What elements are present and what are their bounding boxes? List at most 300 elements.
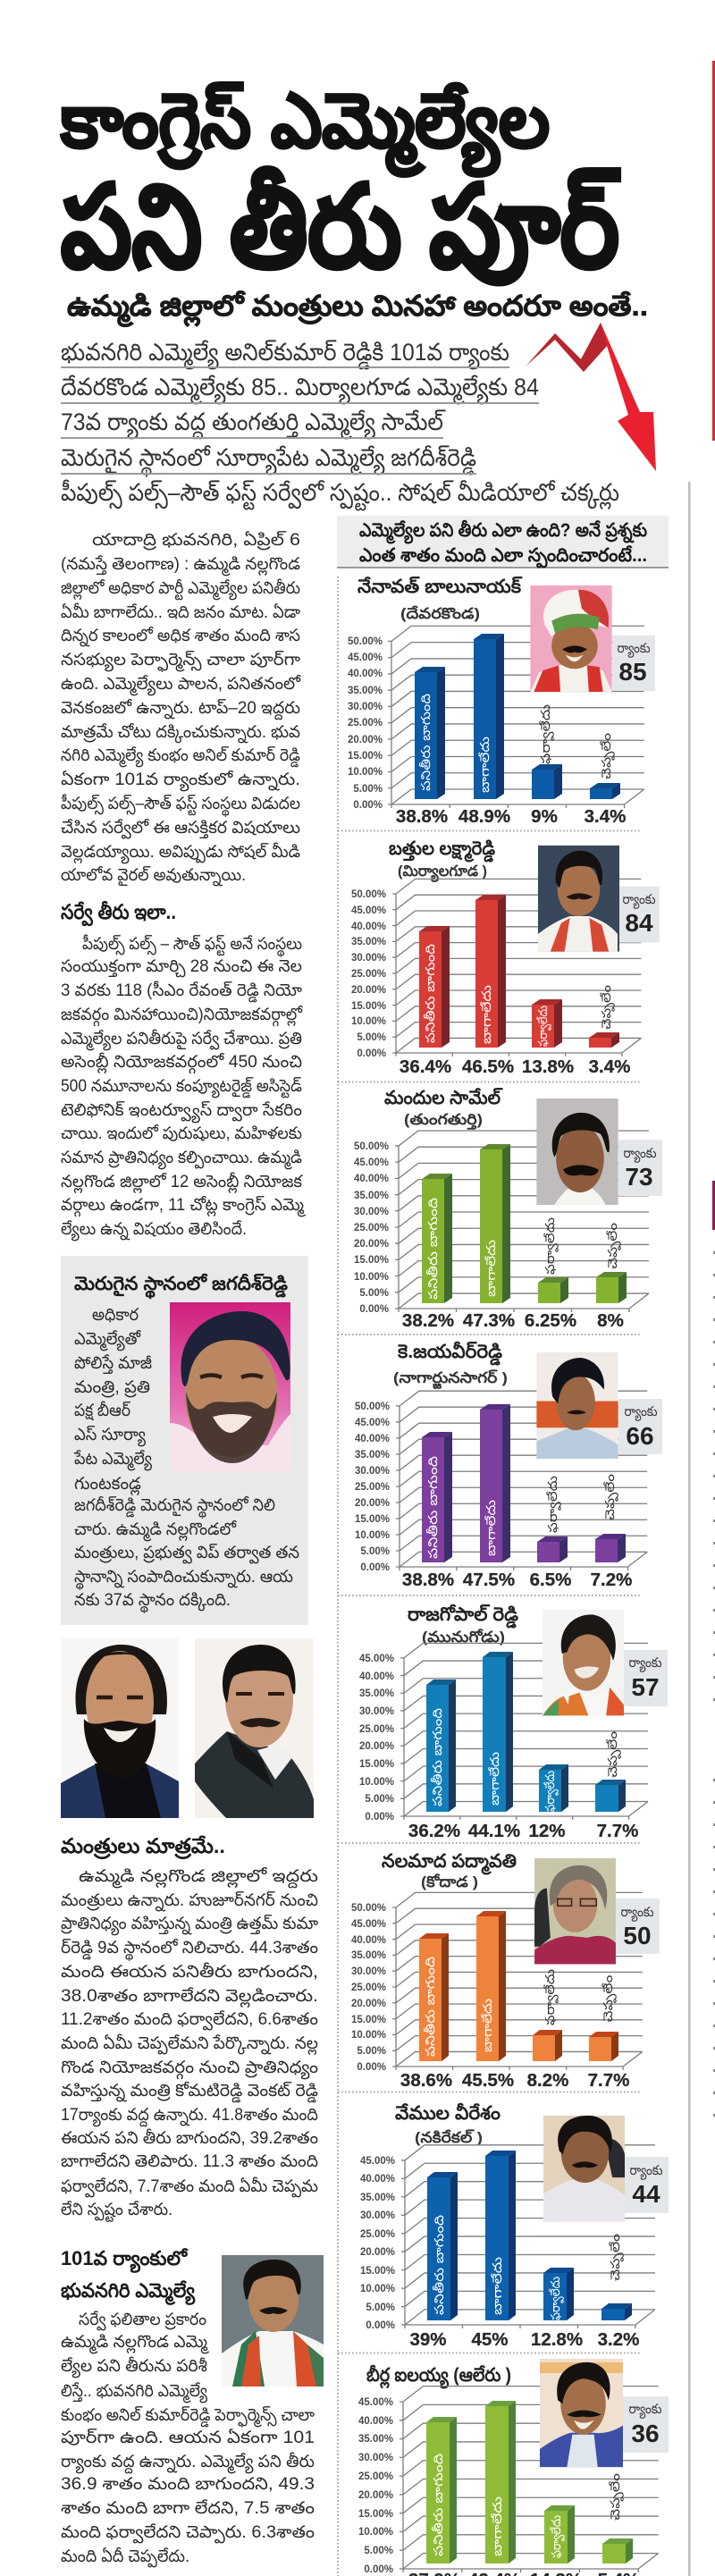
chart panel: Balu Naik: 9% bbox=[531, 806, 558, 827]
chart panel: Jayaveer Reddy: 38.8% bbox=[402, 1570, 454, 1590]
chart panel: Samel: 40.00% bbox=[354, 1174, 389, 1184]
chart panel: Samel: 35.00% bbox=[354, 1191, 389, 1201]
rank badge: 57: ర్యాంకు bbox=[629, 1655, 661, 1672]
article: rank 101 text: ల్యేల పని తీరును పరిశీ bbox=[61, 2357, 207, 2378]
chart panel: Jayaveer Reddy: 6.5% bbox=[530, 1570, 571, 1590]
deck lines: భువనగిరి ఎమ్మెల్యే అనిల్‌కుమార్ రెడ్డికి 101వ ర్యాంకు bbox=[61, 339, 509, 370]
chart panel: Rajagopal Reddy: 12% bbox=[528, 1821, 566, 1841]
chart panel: Ilaiah: 10.00% bbox=[358, 2527, 393, 2538]
chart panel: Lakshma Reddy: 15.00% bbox=[351, 1001, 386, 1012]
article: intro text: (నమస్తే తెలంగాణ) : ఉమ్మడి నల్లగొండ bbox=[61, 555, 300, 577]
chart panel: Balu Naik: ఫర్వాలేదు bbox=[538, 704, 554, 764]
chart panel: Padmavathi: 45.5% bbox=[462, 2070, 514, 2091]
chart panel: Veeresham: బాగాలేదు bbox=[490, 2257, 504, 2315]
chart panel: Veeresham: 0.00% bbox=[366, 2320, 395, 2331]
chart panel: Rajagopal Reddy: రాజగోపాల్ రెడ్డి bbox=[408, 1604, 518, 1629]
chart panel: Rajagopal Reddy: 35.00% bbox=[359, 1688, 394, 1699]
chart panel: Samel: 10.00% bbox=[354, 1272, 389, 1283]
chart panel: Veeresham: 3.2% bbox=[598, 2329, 639, 2350]
chart panel: Ilaiah: బాగాలేదు bbox=[490, 2496, 504, 2556]
text: Jagadish Reddy: గుంటకండ్ల bbox=[74, 1475, 141, 1496]
chart panel: Padmavathi: 38.6% bbox=[400, 2070, 452, 2091]
article: survey text: 500 నమూనాలను కంప్యూటరైజ్డ్ అసిస్టెడ్ bbox=[61, 1077, 302, 1099]
article: intro text bbox=[61, 531, 301, 887]
text: Jagadish Reddy: చారు. ఉమ్మడి నల్లగొండలో bbox=[74, 1520, 237, 1542]
chart panel: Rajagopal Reddy: 30.00% bbox=[359, 1706, 394, 1717]
chart panel: Rajagopal Reddy: పనితీరు బాగుంది bbox=[430, 1708, 444, 1806]
article: rank 101 text: పూర్‌గా ఉంది. ఆయన ఏకంగా 101 bbox=[61, 2429, 315, 2447]
chart panel: Veeresham: 30.00% bbox=[360, 2210, 395, 2221]
chart panel: Balu Naik: 5.00% bbox=[353, 784, 383, 795]
chart panel: Padmavathi: 25.00% bbox=[351, 1983, 386, 1993]
title: పని తీరు పూర్ bbox=[61, 164, 620, 291]
chart panel: Balu Naik: 0.00% bbox=[353, 800, 383, 811]
chart panel: Padmavathi: 30.00% bbox=[351, 1966, 386, 1977]
article: intro text: మాత్రమే చోటు దక్కించుకున్నారు. భువ bbox=[61, 723, 300, 744]
chart panel: Padmavathi bbox=[351, 1851, 660, 2091]
chart panel: Padmavathi: (కోదాడ ) bbox=[421, 1873, 478, 1890]
chart panel: Lakshma Reddy: బాగాలేదు bbox=[479, 985, 493, 1044]
chart panel: Jayaveer Reddy: 7.2% bbox=[591, 1570, 632, 1590]
chart panel: Ilaiah: 0.00% bbox=[364, 2564, 393, 2575]
rank badge: 85: 85 bbox=[618, 658, 647, 686]
chart panel: Balu Naik: 10.00% bbox=[348, 767, 383, 778]
rank badge: 44: 44 bbox=[632, 2180, 660, 2208]
chart panel: Samel: పనితీరు బాగుంది bbox=[425, 1198, 440, 1300]
article: survey text: చాయి. ఇందులో పురుషులు, మహిళలకు bbox=[61, 1124, 302, 1143]
chart panel: Rajagopal Reddy: 25.00% bbox=[359, 1724, 394, 1735]
article: rank 101 text: శాతం మంది బాగా లేదని, 7.5 శాతం bbox=[61, 2499, 315, 2518]
rank badge: 57: 57 bbox=[631, 1673, 660, 1701]
chart panel: Balu Naik: 15.00% bbox=[348, 751, 383, 762]
chart panel: Samel: ఫర్వాలేదు bbox=[543, 1217, 559, 1275]
chart panel: Padmavathi: 15.00% bbox=[351, 2015, 386, 2025]
rank badge: 36: ర్యాంకు bbox=[629, 2402, 661, 2419]
chart panel: Samel: చెప్పలేం bbox=[605, 1223, 621, 1269]
chart panel: Padmavathi: 0.00% bbox=[357, 2062, 386, 2073]
article: ministers text: మంది ఏమీ చెప్పలేమని పేర్కొన్నారు. నల్ల bbox=[61, 2034, 318, 2056]
chart panel: Lakshma Reddy: 45.00% bbox=[351, 905, 386, 916]
rank badge: 66 bbox=[618, 1399, 662, 1454]
rank badge: 73: 73 bbox=[625, 1163, 653, 1191]
chart panel: Balu Naik: 20.00% bbox=[348, 735, 383, 745]
icon: falling red arrow bbox=[526, 323, 656, 471]
chart panel: Padmavathi: 45.00% bbox=[351, 1919, 386, 1930]
rank badge: 50: 50 bbox=[623, 1922, 652, 1949]
heading: ministers: మంత్రులు మాత్రమే.. bbox=[61, 1834, 225, 1860]
chart panel: Rajagopal Reddy bbox=[359, 1604, 668, 1841]
chart panel: Jayaveer Reddy bbox=[355, 1341, 662, 1590]
chart panel: Jayaveer Reddy: 10.00% bbox=[355, 1530, 390, 1541]
rank badge: 50: ర్యాంకు bbox=[620, 1905, 654, 1922]
rank badge: 44 bbox=[625, 2157, 669, 2213]
chart panel: Veeresham: ఫర్వాలేదు bbox=[548, 2277, 564, 2320]
chart panel: Padmavathi: ఫర్వాలేదు bbox=[543, 1969, 559, 2025]
article: ministers text: మంది ఈయన పనితీరు బాగుందని, bbox=[61, 1963, 318, 1982]
article: survey text: టెలిఫోనిక్ ఇంటర్వ్యూస్ ద్వారా సేకరిం bbox=[61, 1101, 302, 1124]
chart panel: Padmavathi: 10.00% bbox=[351, 2030, 386, 2041]
rank badge: 57 bbox=[624, 1650, 668, 1706]
article: rank 101 text: ర్యాంకు వద్ద ఉన్నారు. ఎమ్మెల్యే పని తీరు bbox=[61, 2453, 315, 2474]
chart panel: Jayaveer Reddy: 0.00% bbox=[360, 1562, 390, 1573]
chart panel: Veeresham: 45% bbox=[471, 2329, 509, 2350]
chart panel: Padmavathi: 5.00% bbox=[357, 2046, 386, 2057]
article: intro text: ఉంది. ఎమ్మెల్యేలు పాలన, పనితనంలో bbox=[61, 675, 301, 696]
article: ministers text: మంత్రులు ఉన్నారు. హుజూర్‌నగర్ నుంచి bbox=[61, 1891, 318, 1912]
chart panel: Lakshma Reddy: 0.00% bbox=[357, 1048, 386, 1059]
chart panel: Jayaveer Reddy: (నాగార్జునసాగర్ ) bbox=[393, 1369, 508, 1389]
chart panel: Veeresham: 12.8% bbox=[531, 2329, 583, 2350]
heading: rank 101: భువనగిరి ఎమ్మెల్యే bbox=[61, 2279, 196, 2305]
chart panel: Veeresham: 45.00% bbox=[360, 2156, 395, 2167]
article: ministers text: బాగాలేదని తెలిపారు. 11.3 శాతం మంది bbox=[61, 2152, 318, 2171]
chart panel: Veeresham: 39% bbox=[409, 2329, 447, 2350]
rank badge: 66: ర్యాంకు bbox=[624, 1404, 658, 1421]
chart panel: Balu Naik: చెప్పలేం bbox=[599, 733, 615, 779]
rank badge: 84 bbox=[619, 887, 660, 942]
chart panel: Jayaveer Reddy: 47.5% bbox=[463, 1570, 515, 1590]
chart panel: Samel: 47.3% bbox=[463, 1310, 515, 1331]
chart panel: Veeresham: (నకిరేకల్ ) bbox=[415, 2129, 483, 2146]
chart panel: Jayaveer Reddy: 20.00% bbox=[355, 1498, 390, 1509]
chart panel: Ilaiah bbox=[358, 2359, 669, 2576]
rank badge: 85 bbox=[612, 636, 655, 691]
chart panel: Balu Naik: 50.00% bbox=[348, 636, 383, 647]
chart panel: Veeresham: 15.00% bbox=[360, 2266, 395, 2277]
article: intro text: వెల్లడయ్యాయి. అవిప్పుడు సోషల్ మీడి bbox=[61, 843, 300, 864]
article: survey text: వర్గాలు ఉండగా, 11 చోట్ల కాంగ్రెస్ ఎమ్మె bbox=[61, 1196, 307, 1217]
chart panel: Rajagopal Reddy: 15.00% bbox=[359, 1759, 394, 1770]
column rule bbox=[688, 482, 690, 2576]
chart panel: Veeresham: చెప్పలేం bbox=[608, 2234, 624, 2281]
chart panel: Samel: 15.00% bbox=[354, 1255, 389, 1266]
chart panel: Padmavathi: 8.2% bbox=[527, 2070, 568, 2091]
chart panel: Lakshma Reddy: 10.00% bbox=[351, 1016, 386, 1027]
article: intro text: దిన్నర కాలంలో అధిక శాతం మంది శాస bbox=[61, 627, 300, 647]
deck lines: 73వ ర్యాంకు వద్ద తుంగతుర్తి ఎమ్మెల్యే సామేల్ bbox=[61, 408, 446, 440]
chart panel: Rajagopal Reddy: 45.00% bbox=[359, 1654, 394, 1664]
article: survey text: సంయుక్తంగా మార్చి 28 నుంచి ఈ నెల bbox=[61, 957, 302, 978]
article: intro text: ఏమీ బాగాలేదు.. ఇది జనం మాట. ఏడా bbox=[61, 603, 301, 622]
chart panel: Padmavathi: బాగాలేదు bbox=[480, 1999, 494, 2052]
photo: Veeresham bbox=[543, 2115, 625, 2222]
deck lines: పీపుల్స్ పల్స్–సౌత్ ఫస్ట్ సర్వేలో స్పష్టం.. సోషల్ మీడియాలో చక్కర్లు bbox=[61, 479, 619, 511]
chart panel: Veeresham: వేముల వీరేశం bbox=[395, 2102, 500, 2124]
chart panel: Samel bbox=[354, 1088, 662, 1331]
article: ministers text: లేని స్పష్టం చేశారు. bbox=[61, 2201, 172, 2223]
chart panel: Lakshma Reddy: చెప్పలేం bbox=[599, 985, 615, 1030]
chart panel: Samel: (తుంగతుర్తి) bbox=[404, 1111, 483, 1130]
chart panel: Jayaveer Reddy: 5.00% bbox=[360, 1546, 390, 1557]
chart panel: Balu Naik: 30.00% bbox=[348, 702, 383, 712]
rank badge: 66: 66 bbox=[626, 1422, 654, 1450]
heading: rank 101 bbox=[61, 2247, 196, 2305]
photo: minister Uttam bbox=[61, 1638, 179, 1818]
chart panel: Lakshma Reddy: 36.4% bbox=[400, 1056, 451, 1077]
article: survey text bbox=[61, 934, 307, 1242]
photo: Samel bbox=[536, 1099, 618, 1205]
article: ministers text bbox=[61, 1867, 318, 2223]
chart panel: Rajagopal Reddy: బాగాలేదు bbox=[487, 1752, 501, 1806]
chart panel: Jayaveer Reddy: 25.00% bbox=[355, 1482, 390, 1493]
rank badge: 36 bbox=[623, 2396, 669, 2453]
chart panel: Balu Naik: 3.4% bbox=[585, 806, 626, 827]
chart panel: Balu Naik: 45.00% bbox=[348, 652, 383, 663]
chart panel: Samel: 25.00% bbox=[354, 1223, 389, 1233]
chart panel: Lakshma Reddy: 30.00% bbox=[351, 953, 386, 964]
chart panel: Padmavathi: చెప్పలేం bbox=[601, 1975, 617, 2023]
article: rank 101 text bbox=[61, 2311, 315, 2568]
chart panel: Jayaveer Reddy: 35.00% bbox=[355, 1450, 390, 1461]
chart panel: Samel: 5.00% bbox=[359, 1288, 389, 1299]
chart panel: Lakshma Reddy: బత్తుల లక్ష్మారెడ్డి bbox=[389, 838, 495, 863]
right-edge fragments of the neighbouring page bbox=[712, 61, 715, 2127]
photo: Ilaiah bbox=[540, 2358, 623, 2467]
rank badge: 73 bbox=[618, 1140, 662, 1196]
article: ministers text: ఈయన పని తీరు బాగుందని, 39.2శాతం bbox=[61, 2129, 318, 2148]
chart panel: Balu Naik: 25.00% bbox=[348, 718, 383, 728]
chart panel: Lakshma Reddy: 50.00% bbox=[351, 889, 386, 900]
text: Jagadish Reddy: పక్ష బీఆర్ bbox=[74, 1402, 131, 1421]
chart panel: Balu Naik: 35.00% bbox=[348, 686, 383, 696]
chart panel: Samel: బాగాలేదు bbox=[484, 1240, 498, 1297]
rank badge: 85: ర్యాంకు bbox=[617, 641, 651, 658]
heading: survey: సర్వే తీరు ఇలా.. bbox=[61, 900, 176, 927]
chart panel: Rajagopal Reddy: 36.2% bbox=[408, 1821, 460, 1841]
text: Jagadish Reddy: అధికార bbox=[92, 1306, 139, 1325]
chart panel: Veeresham: 40.00% bbox=[360, 2174, 395, 2185]
article: intro text: యాదాద్రి భువనగిరి, ఏప్రిల్ 6 bbox=[92, 531, 300, 551]
article: intro text: యాలోవ వైరల్ అవుతున్నాయి. bbox=[61, 866, 246, 887]
chart panel: Padmavathi: 35.00% bbox=[351, 1950, 386, 1961]
chart panel: Veeresham: పనితీరు బాగుంది bbox=[432, 2215, 446, 2315]
article: rank 101 text: మంది ఫర్వాలేదని చెప్పారు. 6.3శాతం bbox=[61, 2523, 315, 2544]
chart panel: Samel: 50.00% bbox=[354, 1141, 389, 1152]
chart panel: Padmavathi: 20.00% bbox=[351, 1999, 386, 2009]
chart panel: Samel: 8% bbox=[597, 1310, 624, 1331]
chart panel: Balu Naik: నేనావత్ బాలునాయక్ bbox=[358, 577, 523, 597]
chart panel: Padmavathi: పనితీరు బాగుంది bbox=[423, 1957, 437, 2057]
photo: Bhuvanagiri MLA bbox=[222, 2255, 324, 2387]
article: intro text: వెనకంజలో ఉన్నారు. టాప్–20 ఇద్దరు bbox=[61, 699, 300, 720]
article: ministers text: ర్‌రెడ్డి 9వ స్థానంలో నిలిచారు. 44.3శాతం bbox=[61, 1939, 318, 1961]
chart panel: Lakshma Reddy: ఫర్వాలేదు bbox=[535, 1006, 551, 1047]
chart panel: Rajagopal Reddy: 20.00% bbox=[359, 1741, 394, 1752]
article: rank 101 text: లిస్తే.. భువనగిరి ఎమ్మెల్యే bbox=[61, 2382, 207, 2403]
chart panel: Samel: 45.00% bbox=[354, 1158, 389, 1168]
chart panel: Ilaiah: 30.00% bbox=[358, 2453, 393, 2463]
chart panel: Jayaveer Reddy: బాగాలేదు bbox=[484, 1500, 498, 1556]
article: survey text: పీపుల్స్ పల్స్ – సౌత్ ఫస్ట్ అనే సంస్థలు bbox=[82, 934, 302, 957]
article: ministers text: 11.2శాతం మంది ఫర్వాలేదని, 6.6శాతం bbox=[61, 2010, 318, 2031]
chart panel: Ilaiah: 40.00% bbox=[358, 2416, 393, 2427]
chart panel: Samel: 6.25% bbox=[525, 1310, 576, 1331]
chart panel: Balu Naik: 38.8% bbox=[396, 806, 448, 827]
chart panel: Rajagopal Reddy: 40.00% bbox=[359, 1671, 394, 1682]
title: కాంగ్రెస్ ఎమ్మెల్యేల bbox=[60, 79, 550, 177]
text: Jagadish Reddy: పోలిస్తే మాజీ bbox=[74, 1354, 152, 1375]
chart panel: Lakshma Reddy: 40.00% bbox=[351, 922, 386, 932]
deck lines: దేవరకొండ ఎమ్మెల్యేకు 85.. మిర్యాలగూడ ఎమ్మెల్యేకు 84 bbox=[61, 374, 539, 405]
chart panel: Ilaiah: 15.00% bbox=[358, 2509, 393, 2520]
article: rank 101 text: ఉమ్మడి నల్లగొండ ఎమ్మె bbox=[61, 2333, 210, 2354]
chart panel: Lakshma Reddy: (మిర్యాలగూడ ) bbox=[398, 863, 487, 882]
text: Jagadish Reddy: ఎమ్మెల్యేతో bbox=[74, 1330, 141, 1351]
chart panel: Rajagopal Reddy: 44.1% bbox=[468, 1821, 520, 1841]
chart panel: Padmavathi: 50.00% bbox=[351, 1903, 386, 1914]
article: ministers text: వహిస్తున్న మంత్రి కోమటిరెడ్డి వెంకట్ రెడ్డి bbox=[61, 2081, 318, 2103]
panel header: survey question bbox=[337, 516, 669, 568]
photo: Jayaveer Reddy bbox=[536, 1352, 618, 1459]
chart panel: Rajagopal Reddy: 7.7% bbox=[597, 1821, 638, 1841]
article: intro text: పీపుల్స్ పల్స్–సౌత్ ఫస్ట్ సంస్థలు విడుదల bbox=[61, 794, 300, 817]
article: rank 101 text: 36.9 శాతం మంది బాగుందని, 49.3 bbox=[61, 2475, 315, 2494]
chart panel: Veeresham: 20.00% bbox=[360, 2247, 395, 2258]
article: ministers text: 38.0శాతం బాగాలేదని వెల్లడించారు. bbox=[61, 1987, 318, 2008]
article: intro text: ఏకంగా 101వ ర్యాంకులో ఉన్నారు. bbox=[61, 770, 300, 792]
text: Jagadish Reddy: మంత్రులు, ప్రభుత్వ విప్ తర్వాత తన bbox=[74, 1544, 299, 1564]
chart panel: Ilaiah: చెప్పలేం bbox=[608, 2473, 624, 2521]
text: Jagadish Reddy bbox=[73, 1306, 299, 1613]
chart panel: Ilaiah: పనితీరు బాగుంది bbox=[431, 2454, 445, 2556]
article: survey text: 3 వరకు 118 (సీఎం రేవంత్ రెడ్డి నియో bbox=[61, 981, 302, 1003]
chart panel: Jayaveer Reddy: పనితీరు బాగుంది bbox=[425, 1456, 440, 1559]
chart panel: Veeresham: 5.00% bbox=[366, 2302, 395, 2313]
chart panel: Lakshma Reddy: 3.4% bbox=[589, 1056, 630, 1077]
chart panel: Lakshma Reddy: పనితీరు బాగుంది bbox=[423, 944, 437, 1043]
article: rank 101 text: మంది ఏదీ చెప్పలేదు. bbox=[61, 2547, 189, 2568]
chart panel: Lakshma Reddy: 25.00% bbox=[351, 969, 386, 980]
article: ministers text: ప్రాతినిధ్యం వహిస్తున్న మంత్రి ఉత్తమ్ కుమా bbox=[61, 1915, 318, 1936]
article: survey text: సమాన ప్రాతినిధ్యం కల్పించాయి. ఉమ్మడి bbox=[61, 1149, 302, 1170]
text: Jagadish Reddy: పేట ఎమ్మెల్యే bbox=[73, 1450, 152, 1471]
photo: Lakshma Reddy bbox=[538, 846, 619, 952]
chart panel: Veeresham: 25.00% bbox=[360, 2229, 395, 2240]
chart panel: Ilaiah: 25.00% bbox=[358, 2471, 393, 2482]
rank badge: 50 bbox=[616, 1898, 660, 1954]
chart panel: Ilaiah: 20.00% bbox=[358, 2490, 393, 2501]
chart panel: Veeresham: 10.00% bbox=[360, 2284, 395, 2294]
chart panel: Lakshma Reddy bbox=[351, 838, 660, 1077]
chart panel: Samel: 0.00% bbox=[359, 1304, 389, 1315]
article: survey text: నల్లగొండ జిల్లాలో 12 అసెంబ్లీ నియోజక bbox=[61, 1173, 303, 1194]
chart panel: Padmavathi: నలమాద పద్మావతి bbox=[382, 1851, 517, 1875]
title bbox=[60, 79, 620, 291]
chart panel: Rajagopal Reddy: 0.00% bbox=[365, 1812, 394, 1823]
chart panel: Samel: మందుల సామేల్ bbox=[384, 1088, 503, 1108]
text: Jagadish Reddy: స్థానాన్ని సంపాదించుకున్నారు. ఆయ bbox=[74, 1568, 293, 1590]
article: intro text: నగిరి ఎమ్మెల్యే కుంభం అనిల్ కుమార్ రెడ్డి bbox=[61, 746, 300, 768]
article: rank 101 text: కుంభం అనిల్ కుమార్‌రెడ్డి పెర్ఫార్మెన్స్ చాలా bbox=[61, 2406, 315, 2428]
chart panel: Veeresham: 35.00% bbox=[360, 2193, 395, 2203]
chart panel: Ilaiah: ఫర్వాలేదు bbox=[549, 2515, 565, 2558]
chart panel: Padmavathi: 7.7% bbox=[588, 2070, 629, 2091]
photo: minister Komatireddy bbox=[195, 1638, 314, 1818]
text: Jagadish Reddy: జగదీశ్‌రెడ్డి మెరుగైన స్థానంలో నిలి bbox=[74, 1495, 275, 1519]
deck lines: మెరుగైన స్థానంలో సూర్యాపేట ఎమ్మెల్యే జగదీశ్‌రెడ్డి bbox=[61, 444, 476, 477]
photo: Balu Naik bbox=[530, 585, 612, 692]
chart panel: Jayaveer Reddy: 15.00% bbox=[355, 1514, 390, 1525]
chart panel: Rajagopal Reddy: 10.00% bbox=[359, 1777, 394, 1788]
chart panel: Rajagopal Reddy: చెప్పలేం bbox=[605, 1731, 621, 1778]
photo: Padmavathi bbox=[534, 1858, 616, 1965]
heading: Jagadish Reddy: మెరుగైన స్థానంలో జగదీశ్‌రెడ్డి bbox=[74, 1273, 288, 1300]
rank badge: 36: 36 bbox=[631, 2420, 660, 2447]
rank badge: 84: 84 bbox=[625, 909, 653, 937]
text: Jagadish Reddy: మంత్రి, ప్రతి bbox=[74, 1378, 150, 1398]
article: intro text: నసభ్యుల పెర్ఫార్మెన్స్ చాలా పూర్‌గా bbox=[61, 651, 301, 672]
article: ministers text: గొండ నియోజకవర్గం నుంచి ప్రాతినిధ్యం bbox=[61, 2058, 318, 2080]
article: rank 101 text: సర్వే ఫలితాల ప్రకారం bbox=[79, 2311, 206, 2331]
chart panel: Jayaveer Reddy: ఫర్వాలేదు bbox=[545, 1476, 561, 1533]
rank badge: 73: ర్యాంకు bbox=[624, 1146, 656, 1163]
chart panel: Balu Naik: పనితీరు బాగుంది bbox=[418, 694, 433, 791]
panel header: survey question: ఎంత శాతం మంది ఎలా స్పందించారంటే... bbox=[359, 545, 647, 568]
chart panel: Lakshma Reddy: 46.5% bbox=[462, 1056, 514, 1077]
heading: rank 101: 101వ ర్యాంకులో bbox=[61, 2247, 189, 2273]
chart panel: Jayaveer Reddy: 30.00% bbox=[355, 1466, 390, 1477]
article: intro text: చేసిన సర్వేలో ఈ ఆసక్తికర విషయాలు bbox=[61, 819, 300, 839]
chart panel: Samel: 38.2% bbox=[402, 1310, 454, 1331]
chart panel: Jayaveer Reddy: కె.జయవీర్‌రెడ్డి bbox=[397, 1341, 502, 1366]
chart panel: Ilaiah: 35.00% bbox=[358, 2434, 393, 2445]
article: survey text: అసెంబ్లీ నియోజకవర్గంలో 450 నుంచి bbox=[61, 1053, 302, 1074]
chart panel: Lakshma Reddy: 20.00% bbox=[351, 985, 386, 996]
chart panel: Ilaiah: 45.00% bbox=[358, 2397, 393, 2408]
chart panel: Jayaveer Reddy: 50.00% bbox=[355, 1402, 390, 1412]
text: Jagadish Reddy: ఎస్ సూర్యా bbox=[74, 1426, 146, 1447]
article: intro text: జిల్లాలో అధికార పార్టీ ఎమ్మెల్యేల పనితీరు bbox=[61, 578, 300, 601]
chart panel: Rajagopal Reddy: (మునుగోడు) bbox=[422, 1629, 505, 1646]
panel: Jagadish Reddy box bbox=[61, 1256, 308, 1625]
chart panel: Samel: 20.00% bbox=[354, 1239, 389, 1250]
article: survey text: ఎమ్మెల్యేల పనితీరుపై సర్వే చేశాయి. ప్రతి bbox=[61, 1030, 302, 1051]
chart panel: Jayaveer Reddy: 45.00% bbox=[355, 1418, 390, 1428]
chart panel: Rajagopal Reddy: 5.00% bbox=[365, 1794, 394, 1805]
photo: Rajagopal Reddy bbox=[543, 1609, 624, 1716]
rank badge: 84: ర్యాంకు bbox=[622, 892, 656, 909]
panel header: survey question: ఎమ్మెల్యేల పని తీరు ఎలా ఉంది? అనే ప్రశ్నకు bbox=[359, 519, 647, 544]
chart panel: Ilaiah: 5.00% bbox=[364, 2546, 393, 2556]
photo: Jagadish Reddy bbox=[170, 1302, 290, 1471]
article: survey text: జకవర్గం మినహాయించి)నియోజకవర్గాల్లో bbox=[61, 1006, 303, 1027]
deck lines bbox=[61, 339, 619, 511]
chart panel: Balu Naik: 48.9% bbox=[458, 806, 510, 827]
chart panel: Balu Naik: 40.00% bbox=[348, 669, 383, 679]
chart panel: Balu Naik bbox=[348, 577, 655, 827]
chart panel: Jayaveer Reddy: 40.00% bbox=[355, 1434, 390, 1444]
dotted column divider bbox=[337, 577, 339, 2576]
chart panel: Jayaveer Reddy: చెప్పలేం bbox=[602, 1474, 618, 1520]
subheading: ఉమ్మడి జిల్లాలో మంత్రులు మినహా అందరూ అంతే.. bbox=[67, 290, 648, 327]
article: ministers text: ఉమ్మడి నల్లగొండ జిల్లాలో ఇద్దరు bbox=[79, 1867, 318, 1889]
chart panel: Padmavathi: 40.00% bbox=[351, 1935, 386, 1946]
article: ministers text: 17ర్యాంకు వద్ద ఉన్నారు. 41.8శాతం మంది bbox=[61, 2106, 318, 2127]
chart panel: Lakshma Reddy: 13.8% bbox=[522, 1056, 574, 1077]
article: ministers text: ఫర్వాలేదని, 7.7శాతం మంది ఏమీ చెప్పమ bbox=[61, 2177, 318, 2198]
chart panel: Lakshma Reddy: 5.00% bbox=[357, 1032, 386, 1043]
chart panel: Lakshma Reddy: 35.00% bbox=[351, 937, 386, 947]
chart panel: Balu Naik: (దేవరకొండ) bbox=[400, 605, 480, 622]
chart panel: Rajagopal Reddy: ఫర్వాలేదు bbox=[543, 1771, 559, 1812]
rank badge: 44: ర్యాంకు bbox=[629, 2163, 663, 2180]
chart panel: Veeresham bbox=[360, 2102, 669, 2350]
chart panel: Samel: 30.00% bbox=[354, 1207, 389, 1217]
chart panel: Balu Naik: బాగాలేదు bbox=[477, 737, 492, 793]
chart panel: Ilaiah: బీర్ల ఐలయ్య (ఆలేరు ) bbox=[366, 2364, 511, 2389]
article: survey text: ల్యేలు ఉన్న విషయం తెలిసిందే. bbox=[61, 1220, 247, 1242]
text: Jagadish Reddy: నకు 37వ స్థానం దక్కింది. bbox=[74, 1591, 231, 1613]
